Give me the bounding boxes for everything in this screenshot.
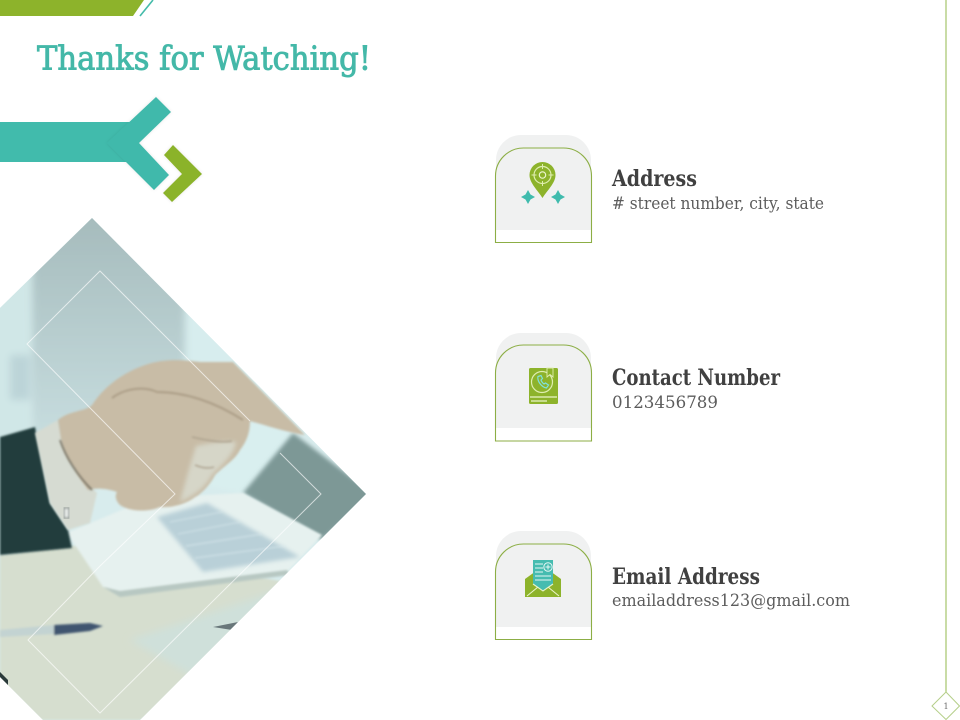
teal bar <box>0 122 132 162</box>
desk highlight <box>141 600 260 670</box>
laptop front edge <box>103 570 290 597</box>
hands <box>58 360 305 511</box>
detail text: emailaddress123@gmail.com <box>612 591 850 611</box>
heading: Contact Number <box>612 365 780 391</box>
handshake photo diamond <box>0 200 380 720</box>
card outline <box>496 148 592 242</box>
laptop screen <box>243 433 375 540</box>
top teal accent stroke <box>140 0 153 16</box>
object corner <box>213 622 238 630</box>
icon: phone book <box>529 368 558 404</box>
arrow graphic <box>0 97 202 202</box>
laptop screen glow <box>180 420 296 493</box>
page number badge: 1 <box>943 702 949 711</box>
card: email address <box>496 531 850 640</box>
laptop base <box>67 493 322 593</box>
finger shading <box>112 389 243 420</box>
card: address <box>496 135 824 242</box>
card: contact number <box>496 333 780 441</box>
green chevron <box>163 145 202 202</box>
top green banner <box>0 0 144 16</box>
desk <box>0 546 280 720</box>
card backing <box>496 531 591 627</box>
keyboard keys <box>185 532 276 558</box>
card outline <box>496 345 592 441</box>
notebook corner <box>0 672 8 685</box>
teal chevron <box>107 97 171 190</box>
keyboard <box>157 503 300 572</box>
heading: Email Address <box>612 564 760 590</box>
title: Thanks for Watching! <box>37 38 371 78</box>
detail text: # street number, city, state <box>612 194 824 214</box>
card backing <box>496 135 591 230</box>
cufflink <box>64 508 69 518</box>
shirt cuff <box>35 420 97 530</box>
icon: envelope with letter <box>525 560 561 597</box>
card outline <box>496 544 592 640</box>
jacket sleeve <box>0 427 72 555</box>
icon: location pin <box>521 162 565 204</box>
wrist shadow <box>60 440 92 490</box>
detail text: 0123456789 <box>612 393 718 413</box>
white outline diamonds <box>27 271 321 713</box>
right vertical rule <box>945 0 947 692</box>
heading: Address <box>611 166 697 192</box>
page number badge <box>932 692 960 720</box>
pen <box>0 623 103 637</box>
card backing <box>496 333 591 428</box>
